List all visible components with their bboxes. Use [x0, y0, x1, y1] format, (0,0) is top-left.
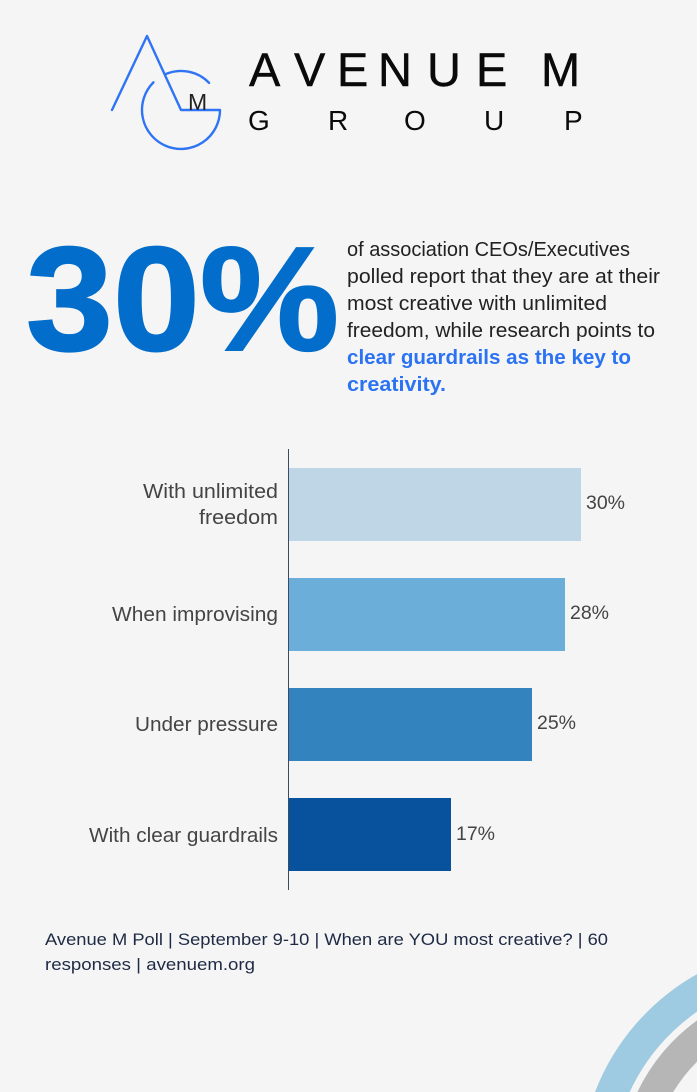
logo mark letter M: M — [188, 89, 207, 115]
bar: under pressure 25% — [135, 688, 576, 761]
decorative corner arcs — [595, 974, 697, 1092]
statistic description: most creative with unlimited — [347, 293, 607, 315]
bar chart: when are you most creative — [89, 449, 625, 890]
bar: with unlimited freedom 30% — [143, 468, 625, 541]
source note — [45, 930, 608, 974]
bar: with clear guardrails 17% — [89, 798, 495, 871]
statistic description — [347, 239, 660, 396]
logo: Avenue M Group — [112, 36, 583, 149]
statistic description: freedom, while research points to — [347, 320, 655, 342]
statistic description: of association CEOs/Executives — [347, 239, 630, 261]
bar: with unlimited freedom 30%: freedom — [199, 507, 278, 529]
statistic description: polled report that they are at their — [347, 266, 660, 288]
bar: when improvising 28%: When improvising — [112, 604, 278, 626]
bar: with clear guardrails 17%: With clear guardrails — [89, 825, 278, 847]
bar: under pressure 25%: 25% — [537, 713, 576, 734]
bar: with clear guardrails 17%: 17% — [456, 824, 495, 845]
source note: responses | avenuem.org — [45, 955, 255, 974]
icon: logo mark — [112, 36, 220, 149]
bar: when improvising 28%: 28% — [570, 603, 609, 624]
statistic description: clear guardrails as the key to — [347, 347, 631, 369]
headline statistic: 30%: 30% — [26, 217, 339, 382]
bar: under pressure 25%: Under pressure — [135, 714, 278, 736]
bar: when improvising 28% — [112, 578, 609, 651]
bar: with unlimited freedom 30%: With unlimited — [143, 481, 278, 503]
bar: with unlimited freedom 30%: 30% — [586, 493, 625, 514]
logo wordmark: Group: GROUP — [248, 105, 583, 136]
chart axis — [288, 449, 289, 890]
source note: Avenue M Poll | September 9-10 | When are YOU most creative? | 60 — [45, 930, 608, 949]
logo wordmark: Avenue M: AVENUE M — [249, 43, 580, 96]
statistic description: creativity. — [347, 374, 446, 396]
